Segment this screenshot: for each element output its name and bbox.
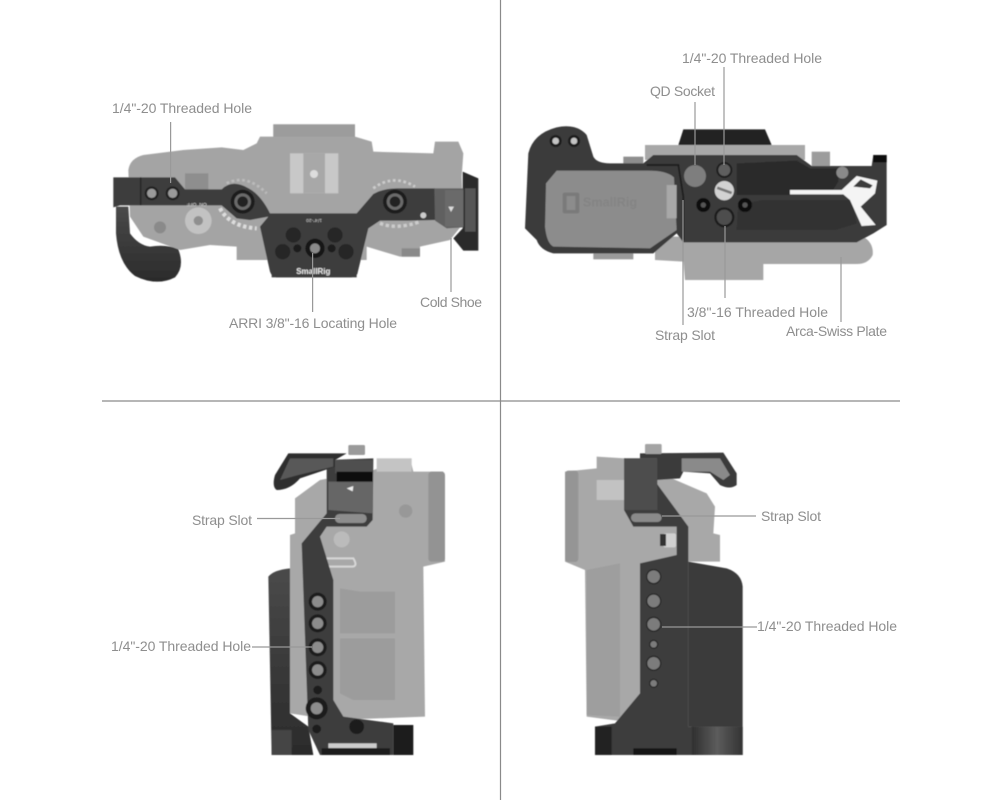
label: Strap Slot: Strap Slot — [655, 327, 715, 343]
leader lines: right side view — [662, 516, 757, 627]
label: Arca-Swiss Plate: Arca-Swiss Plate — [786, 323, 887, 339]
leader lines: left side view — [252, 518, 340, 647]
label: 1/4"-20 Threaded Hole: 1/4"-20 Threaded Hole — [111, 638, 251, 654]
bottom view camera and cage illustration — [525, 126, 887, 280]
top view camera and cage illustration: SmallRig — [296, 267, 331, 276]
label: Strap Slot: Strap Slot — [761, 508, 821, 524]
panel: top view of cage — [112, 100, 482, 331]
panel: left side view of cage — [111, 445, 445, 755]
label: 1/4"-20 Threaded Hole: 1/4"-20 Threaded Hole — [112, 100, 252, 116]
label: Strap Slot: Strap Slot — [192, 512, 252, 528]
top view camera and cage illustration: 1/4"-20 — [306, 217, 322, 223]
bottom view camera and cage illustration: SmallRig — [583, 196, 637, 210]
label: Cold Shoe: Cold Shoe — [420, 294, 482, 310]
top view camera and cage illustration: ON OFF — [187, 201, 207, 207]
leader lines: top view — [171, 122, 451, 312]
label: 3/8"-16 Threaded Hole: 3/8"-16 Threaded Hole — [687, 304, 828, 320]
panel: right side view of cage — [565, 444, 897, 755]
label: 1/4"-20 Threaded Hole: 1/4"-20 Threaded Hole — [757, 618, 897, 634]
top view camera and cage illustration — [113, 124, 478, 282]
panel: bottom view of cage — [525, 50, 887, 343]
label: ARRI locating hole: ARRI 3/8"-16 Locating Hole — [229, 315, 397, 331]
leader lines: bottom view — [683, 67, 841, 325]
label: 1/4"-20 Threaded Hole: 1/4"-20 Threaded Hole — [682, 50, 822, 66]
right side camera and cage illustration — [565, 444, 743, 755]
label: QD Socket: QD Socket — [650, 83, 715, 99]
left side camera and cage illustration — [268, 445, 445, 755]
